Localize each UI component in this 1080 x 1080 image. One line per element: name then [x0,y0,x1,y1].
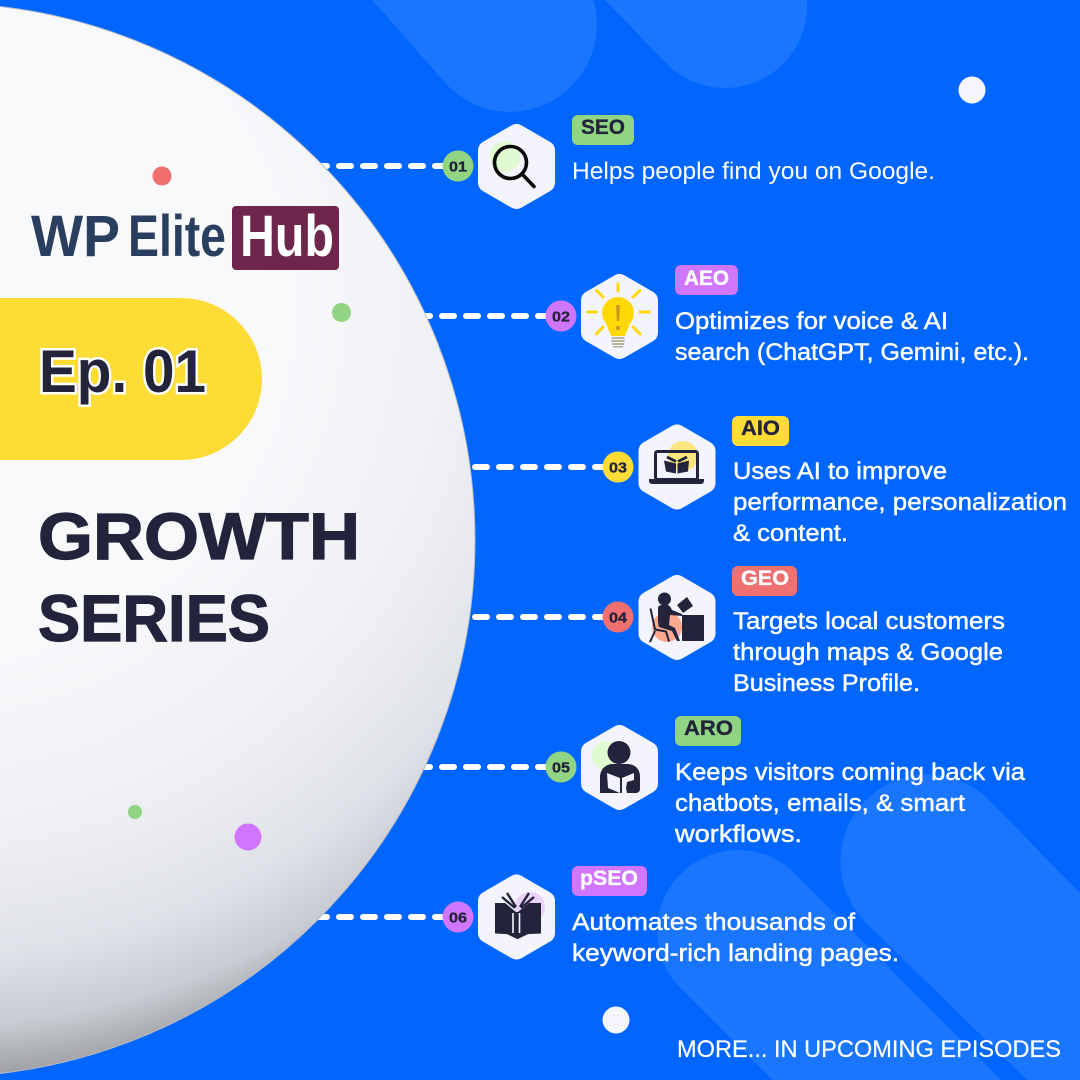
description: pSEO: keyword-rich landing pages. [572,940,899,967]
icon: person reading [591,735,648,800]
connector: dashed line 04 [451,614,610,620]
description: pSEO: Automates thousands of [572,909,855,936]
title: Growth Series: GROWTH [38,499,360,573]
description: AIO: performance, personalization [733,489,1067,516]
icon: light bulb [588,284,649,349]
description: AIO [733,458,1067,547]
logo: WP Elite Hub: Elite [128,204,226,269]
tag: SEO [572,115,634,145]
step 01: SEO [442,115,935,199]
footer note: MORE... IN UPCOMING EPISODES [677,1036,1061,1063]
icon: laptop with book [648,434,706,500]
logo: WP Elite Hub: WP [31,204,120,269]
description: ARO: Keeps visitors coming back via [675,759,1025,786]
decorative dot: green [332,303,351,322]
episode label: Ep. 01 [39,338,206,405]
icon: magnifying glass [488,134,545,199]
description: ARO: workflows. [674,821,802,848]
number badge 03 [602,452,634,482]
tag: pSEO [572,866,647,896]
number badge 01 [442,150,474,182]
step 03: AIO [602,416,1067,547]
step 02: AEO [546,265,1029,366]
step 06: pSEO [442,866,899,967]
description: GEO: through maps & Google [733,639,1003,666]
step 05: ARO [546,716,1025,848]
description: pSEO [572,909,899,967]
tag: ARO [675,716,741,746]
tag: ARO: ARO [684,716,733,740]
description: AEO [675,308,1029,366]
number badge 06 [442,902,474,932]
decorative dot: purple [234,824,262,850]
decorative dot: small green [128,805,142,819]
connector: dashed line 05 [418,764,553,770]
tag: GEO [732,566,797,596]
icon: open book [488,884,545,950]
description: AIO: Uses AI to improve [733,458,947,485]
connector: dashed line 02 [418,313,553,319]
number badge 01: 01 [449,160,467,176]
description: ARO [674,759,1025,848]
tag: AEO: AEO [684,266,729,290]
number badge 04: 04 [609,610,627,626]
number badge 02: 02 [552,310,570,326]
number badge 05 [546,752,576,782]
description: AEO: Optimizes for voice & AI [675,308,948,335]
step 04: GEO [602,566,1005,697]
icon: person at desk [648,585,706,650]
description: GEO: Targets local customers [733,608,1005,635]
number badge 03: 03 [609,460,627,476]
description: AIO: & content. [733,520,848,547]
description: AEO: search (ChatGPT, Gemini, etc.). [675,339,1029,366]
number badge 06: 06 [449,910,467,926]
episode pill [0,298,262,460]
number badge 04 [602,602,634,632]
number badge 02 [546,300,576,332]
tag: pSEO: pSEO [580,866,638,890]
description: SEO: Helps people find you on Google. [572,158,935,185]
connector: dashed line 01 [315,163,450,169]
description: GEO: Business Profile. [733,670,920,697]
decorative dot: red [152,166,172,186]
tag: AIO: AIO [741,416,780,440]
tag: AIO [732,416,789,446]
title: Growth Series: SERIES [38,581,270,655]
tag: SEO: SEO [581,115,625,139]
description: GEO [733,608,1005,697]
decorative dot: white top [958,76,986,104]
tag: AEO [675,265,738,295]
logo: WP Elite Hub [31,204,339,270]
number badge 05: 05 [552,760,570,776]
connector: dashed line 03 [451,464,610,470]
decorative dot: white bottom [602,1006,630,1034]
tag: GEO: GEO [741,566,789,590]
connector: dashed line 06 [315,914,450,920]
logo: WP Elite Hub: Hub [240,204,334,269]
description: ARO: chatbots, emails, & smart [675,790,965,817]
title: Growth Series [38,499,360,655]
panel: white sphere [0,3,475,1077]
